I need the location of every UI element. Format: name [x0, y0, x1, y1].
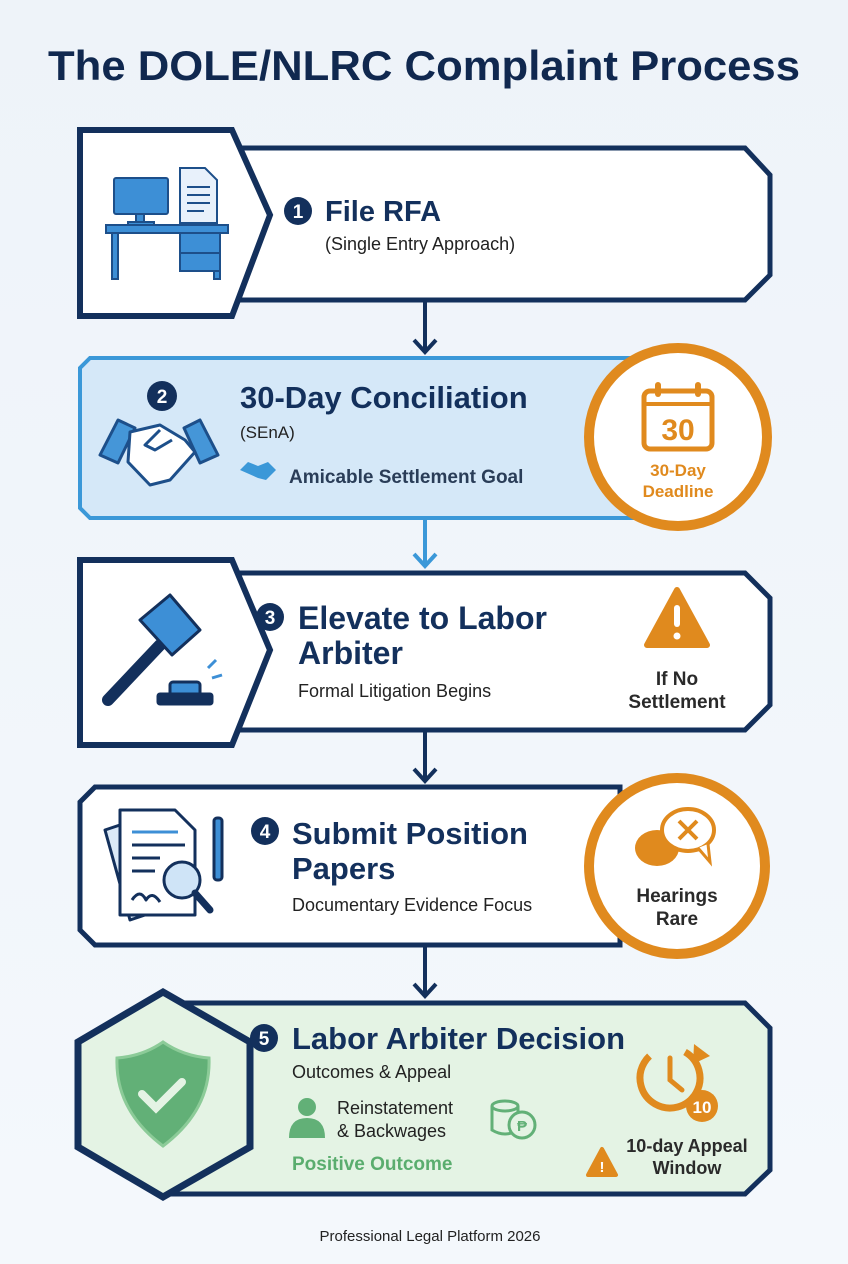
- callout: 10-day appeal window: !: [600, 1159, 604, 1176]
- step 2 heading: 30-Day Conciliation: [240, 380, 528, 415]
- callout: 30-day deadline: 30: [661, 414, 695, 447]
- outcome: reinstatement: ₱: [517, 1118, 527, 1135]
- step 2 badge: 2: [157, 387, 167, 408]
- step 3 heading: Elevate to Labor: [298, 600, 547, 636]
- step 1 heading: File RFA: [325, 196, 441, 228]
- callout: 10-day appeal window: [588, 1037, 748, 1178]
- positive outcome label: Positive Outcome: [292, 1154, 452, 1175]
- step 3 heading: [256, 600, 547, 671]
- arrow 2: [414, 520, 436, 566]
- step 4 heading: 4: [260, 822, 271, 843]
- callout: if no settlement: Settlement: [628, 692, 726, 713]
- callout: hearings rare: Hearings: [636, 886, 718, 907]
- callout: 30-day deadline: [589, 348, 767, 526]
- amicable settlement: Amicable Settlement Goal: [289, 467, 523, 488]
- step 1 heading: 1: [293, 202, 304, 223]
- callout: hearings rare: Rare: [656, 909, 698, 930]
- step 5 heading: Labor Arbiter Decision: [292, 1021, 625, 1056]
- outcome: reinstatement: [289, 1098, 535, 1141]
- title: The DOLE/NLRC Complaint Process: [48, 42, 800, 89]
- step 3 heading: 3: [265, 608, 275, 629]
- step 4 heading: Papers: [292, 851, 395, 886]
- callout: 30-day deadline: Deadline: [643, 482, 713, 501]
- step 3 subtitle: Formal Litigation Begins: [298, 681, 491, 701]
- step 5 heading: 5: [259, 1029, 270, 1050]
- step 5 subtitle: Outcomes & Appeal: [292, 1062, 451, 1082]
- panel: step 1: [80, 130, 770, 316]
- arrow 3: [414, 730, 436, 781]
- icon: handshake: [100, 420, 218, 485]
- step 4 heading: [251, 816, 528, 886]
- callout: if no settlement: If No: [656, 669, 698, 690]
- step 1 subtitle: (Single Entry Approach): [325, 234, 515, 254]
- step 3 heading: Arbiter: [298, 635, 403, 671]
- footer: Professional Legal Platform 2026: [320, 1228, 540, 1245]
- icon: gavel: [108, 595, 222, 704]
- panel: step 5: [78, 992, 770, 1197]
- step 4 subtitle: Documentary Evidence Focus: [292, 895, 532, 915]
- step 4 heading: Submit Position: [292, 816, 528, 851]
- panel: step 3: [80, 560, 770, 745]
- icon: shield check: [117, 1042, 209, 1146]
- icon: desk with computer: [106, 168, 228, 279]
- panel: step 2: [80, 348, 767, 526]
- callout: 10-day appeal window: Window: [653, 1158, 722, 1178]
- callout: 10-day appeal window: 10: [693, 1098, 711, 1117]
- callout: hearings rare: [589, 778, 765, 954]
- callout: 10-day appeal window: 10-day Appeal: [626, 1136, 748, 1156]
- amicable settlement: [240, 462, 523, 488]
- callout: 30-day deadline: 30-Day: [650, 461, 706, 480]
- arrow 1: [414, 300, 436, 352]
- outcome: reinstatement: Reinstatement: [337, 1098, 453, 1118]
- callout: if no settlement: [628, 590, 726, 713]
- panel: step 4: [80, 778, 765, 954]
- step 2 subtitle: (SEnA): [240, 423, 295, 442]
- step 2 badge: [147, 381, 177, 411]
- icon: papers with magnifier: [105, 810, 222, 920]
- outcome: reinstatement: & Backwages: [337, 1121, 446, 1141]
- arrow 4: [414, 945, 436, 996]
